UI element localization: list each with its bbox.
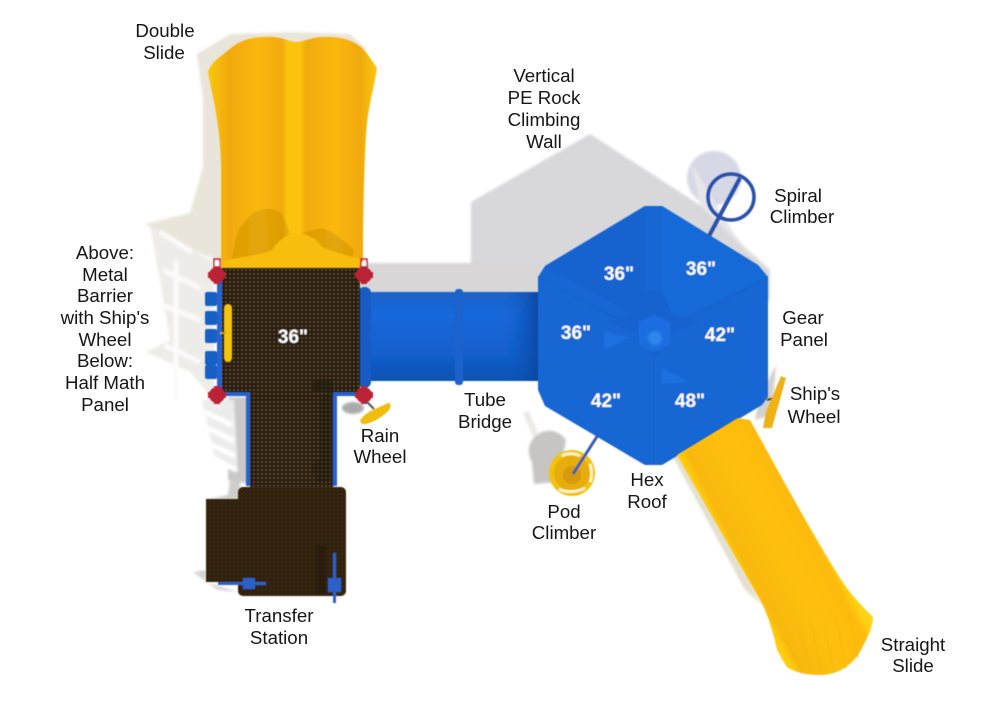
label: Above / Below panels: Half Math [65, 372, 145, 393]
upper deck: 36" [278, 327, 308, 348]
left barrier [205, 280, 232, 395]
tube bridge [358, 287, 542, 388]
label: Rain Wheel: Rain [361, 425, 399, 446]
label: Rain Wheel: Wheel [354, 446, 406, 467]
label: Above / Below panels: with Ship's [60, 307, 149, 328]
label: Tube Bridge: Tube [464, 389, 506, 410]
label: Above / Below panels: Metal [82, 264, 128, 285]
label: Spiral Climber: Climber [770, 206, 834, 227]
label: Spiral Climber: Spiral [774, 185, 822, 206]
label: Transfer Station: Transfer [245, 605, 313, 626]
label: Vertical PE Rock Climbing Wall: PE Rock [508, 87, 581, 108]
label: Above / Below panels: Wheel [79, 329, 131, 350]
label: Above / Below panels: Barrier [77, 285, 133, 306]
label: Hex Roof: Roof [627, 491, 668, 512]
walkway [222, 393, 358, 488]
label: Above / Below panels: Panel [81, 394, 129, 415]
label: Tube Bridge: Bridge [458, 411, 512, 432]
hex roof [538, 206, 768, 465]
icon: pod climber [549, 435, 598, 496]
roof height labels: 36" [604, 264, 634, 285]
label: Ship's Wheel: Ship's [790, 383, 840, 404]
upper deck [221, 268, 360, 395]
roof height labels: 36" [561, 323, 591, 344]
label: Straight Slide: Straight [881, 634, 946, 655]
transfer station [206, 487, 346, 603]
label: Double Slide: Slide [143, 42, 185, 63]
label: Pod Climber: Pod [547, 501, 581, 522]
roof height labels: 36" [686, 259, 716, 280]
label: Pod Climber: Climber [532, 522, 596, 543]
roof height labels: 42" [591, 391, 621, 412]
roof height labels: 48" [675, 391, 705, 412]
icon: ship's wheel [763, 376, 786, 428]
label: Gear Panel: Gear [782, 307, 824, 328]
label: Ship's Wheel: Wheel [788, 406, 840, 427]
straight slide [677, 418, 873, 675]
icon: rain wheel [360, 401, 391, 424]
label: Hex Roof: Hex [630, 469, 664, 490]
red corner posts [208, 259, 373, 404]
double slide [208, 37, 377, 270]
label: Gear Panel: Panel [780, 329, 828, 350]
label: Double Slide: Double [135, 20, 195, 41]
label: Transfer Station: Station [250, 627, 308, 648]
label: Vertical PE Rock Climbing Wall: Wall [526, 131, 562, 152]
label: Above / Below panels: Above: [76, 242, 134, 263]
icon: spiral climber [708, 174, 754, 236]
label: Vertical PE Rock Climbing Wall: Vertical [513, 65, 575, 86]
roof height labels [561, 259, 735, 412]
label: Vertical PE Rock Climbing Wall: Climbing [508, 109, 580, 130]
label: Above / Below panels: Below: [77, 350, 133, 371]
label: Straight Slide: Slide [892, 655, 934, 676]
ground shadows [145, 32, 776, 605]
roof height labels: 42" [705, 325, 735, 346]
